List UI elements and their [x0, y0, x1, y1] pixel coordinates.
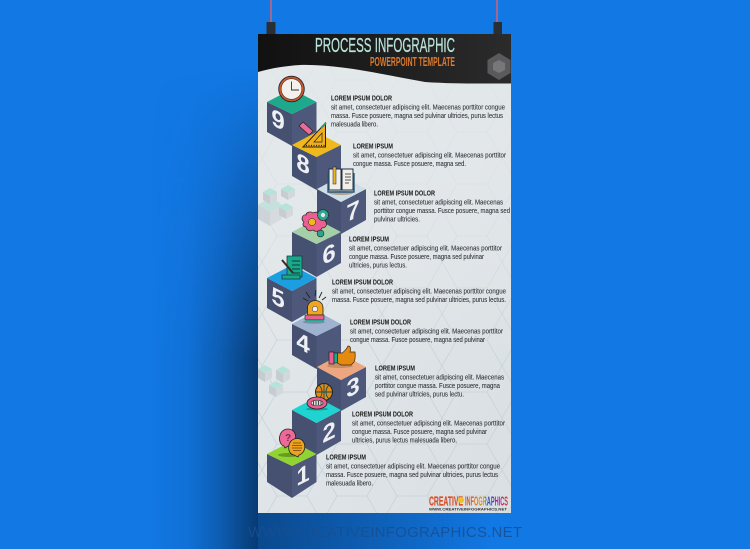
text block 5: [332, 278, 506, 304]
icon: clock: [279, 76, 304, 102]
icon: scroll and quill: [282, 256, 302, 279]
text block 2: congue massa. Fusce posuere, magna sed pulvinar: [352, 428, 488, 436]
icon: siren: [303, 290, 326, 324]
icon: ruler and pencil: [299, 122, 326, 147]
text block 4: LOREM IPSUM DOLOR: [350, 318, 412, 326]
icon: basketball: [316, 384, 332, 400]
text block 9: LOREM IPSUM DOLOR: [331, 94, 393, 102]
cube 9: [267, 89, 316, 146]
cube 8: 8: [296, 148, 310, 181]
text block 6: ultricies, purus lectus.: [349, 262, 407, 270]
cube 1: 1: [296, 459, 310, 492]
cube 7: 7: [346, 195, 360, 228]
text block 1: sit amet, consectetuer adipiscing elit. Maecenas porttitor congue: [326, 462, 500, 470]
header band: [258, 34, 511, 84]
text block 4: congue massa. Fusce posuere, magna sed pulvinar: [350, 336, 486, 344]
cube 7: [317, 176, 366, 234]
text block 3: porttitor congue massa. Fusce posuere, magna: [375, 382, 500, 390]
cube 3: 3: [346, 371, 360, 404]
text block 9: massa. Fusce posuere, magna sed pulvinar ultricies, purus lectus: [331, 112, 503, 120]
text block 7: [374, 188, 510, 224]
text block 9: sit amet, consectetuer adipiscing elit. Maecenas porttitor congue: [331, 104, 505, 112]
text block 8: sit amet, consectetuer adipiscing elit. Maecenas porttitor: [353, 152, 507, 160]
logo: WWW.CREATIVEINFOGRAPHICS.NET: [429, 506, 508, 512]
text block 4: sit amet, consectetuer adipiscing elit. Maecenas porttitor: [350, 328, 504, 336]
text block 8: LOREM IPSUM: [353, 142, 393, 150]
background shadow: [172, 90, 472, 549]
cube 5: [267, 265, 316, 322]
title: PROCESS INFOGRAPHIC: [315, 35, 455, 57]
text block 3: sit amet, consectetuer adipiscing elit. Maecenas: [375, 374, 504, 382]
text block 6: sit amet, consectetuer adipiscing elit. Maecenas porttitor: [349, 244, 503, 252]
icon: speech bubbles: [278, 429, 305, 457]
text block 8: congue massa. Fusce posuere, magna sed.: [353, 160, 466, 168]
text block 7: porttitor congue massa. Fusce posuere, magna sed: [374, 207, 510, 215]
text block 5: massa. Fusce posuere, magna sed pulvinar ultricies, purus lectus.: [332, 296, 506, 304]
text block 1: malesuada libero.: [326, 480, 373, 488]
cube 4: [292, 311, 341, 369]
text block 1: massa. Fusce posuere, magna sed pulvinar ultricies, purus lectus: [326, 471, 498, 479]
cube 5: 5: [271, 282, 285, 315]
text block 9: malesuada libero.: [331, 120, 378, 128]
text block 5: sit amet, consectetuer adipiscing elit. Maecenas porttitor congue: [332, 288, 506, 296]
decorative cubes: lower group: [258, 365, 290, 397]
text: INFOGRAPHICS: [465, 494, 508, 508]
text block 1: LOREM IPSUM: [326, 452, 366, 462]
subtitle: POWERPOINT TEMPLATE: [370, 55, 455, 69]
text block 6: congue massa. Fusce posuere, magna sed pulvinar: [349, 253, 485, 261]
cube 4: 4: [296, 327, 310, 360]
text block 7: LOREM IPSUM DOLOR: [374, 188, 436, 198]
text block 3: LOREM IPSUM: [375, 364, 415, 372]
icon: gear brain: [302, 210, 328, 237]
decorative cubes: upper group: [258, 185, 295, 226]
icon: american football: [306, 397, 328, 410]
logo: CREATIVE: [429, 494, 463, 508]
text block 1: [326, 452, 500, 488]
cube 8: [292, 132, 341, 190]
cube 9: 9: [271, 104, 285, 137]
cube 1: [267, 441, 316, 498]
text block 2: ultricies, purus lectus malesuada libero.: [352, 436, 457, 444]
cube 2: [292, 397, 341, 455]
cube 2: 2: [322, 416, 336, 449]
hanging strings and clips: [266, 0, 502, 38]
icon: thumbs up: [327, 346, 355, 368]
cube 6: 6: [322, 238, 336, 271]
text block 8: [353, 142, 507, 168]
icon: hexagon badge: [488, 53, 510, 80]
cube 6: [292, 219, 341, 277]
text block 2: [352, 410, 506, 444]
logo: [429, 494, 508, 512]
text block 4: [350, 318, 504, 344]
poster: [258, 34, 511, 513]
text block 3: [375, 364, 504, 398]
text block 9: [331, 94, 505, 128]
text block 3: sed pulvinar ultricies, purus lectu.: [375, 390, 464, 398]
cube 3: [317, 354, 366, 411]
text block 6: LOREM IPSUM: [349, 234, 389, 244]
text block 6: [349, 234, 503, 270]
icon: speech bubbles: ?: [285, 433, 291, 444]
text block 2: sit amet, consectetuer adipiscing elit. Maecenas porttitor: [352, 420, 506, 428]
text block 7: pulvinar ultricies.: [374, 216, 420, 224]
text block 5: LOREM IPSUM DOLOR: [332, 278, 394, 286]
text block 2: LOREM IPSUM DOLOR: [352, 410, 414, 418]
watermark: WWW.CREATIVEINFOGRAPHICS.NET: [248, 524, 522, 541]
icon: book: [328, 167, 354, 195]
text block 7: sit amet, consectetuer adipiscing elit. Maecenas: [374, 198, 503, 206]
